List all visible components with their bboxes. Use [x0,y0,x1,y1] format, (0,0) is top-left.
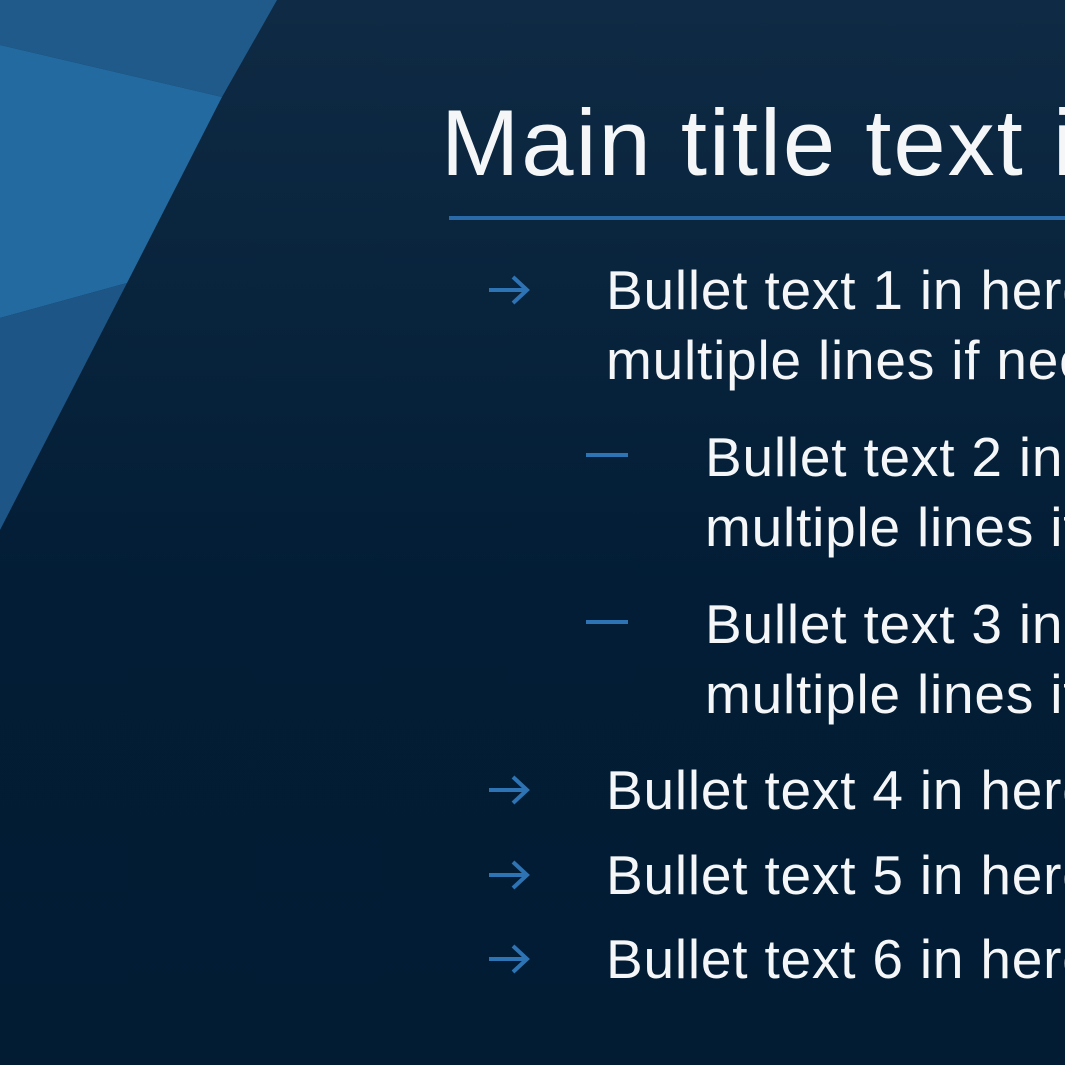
bullet 1 [489,259,1065,391]
icon: arrow [489,944,530,974]
icon: arrow [489,776,530,804]
icon: dash [586,620,628,624]
icon: arrow [489,276,530,304]
background polygons [0,0,277,530]
bullet 3 [586,593,1065,725]
bullet 2 [586,426,1065,558]
icon: arrow [489,860,530,890]
title underline [449,216,1065,220]
icon: dash [586,453,628,457]
